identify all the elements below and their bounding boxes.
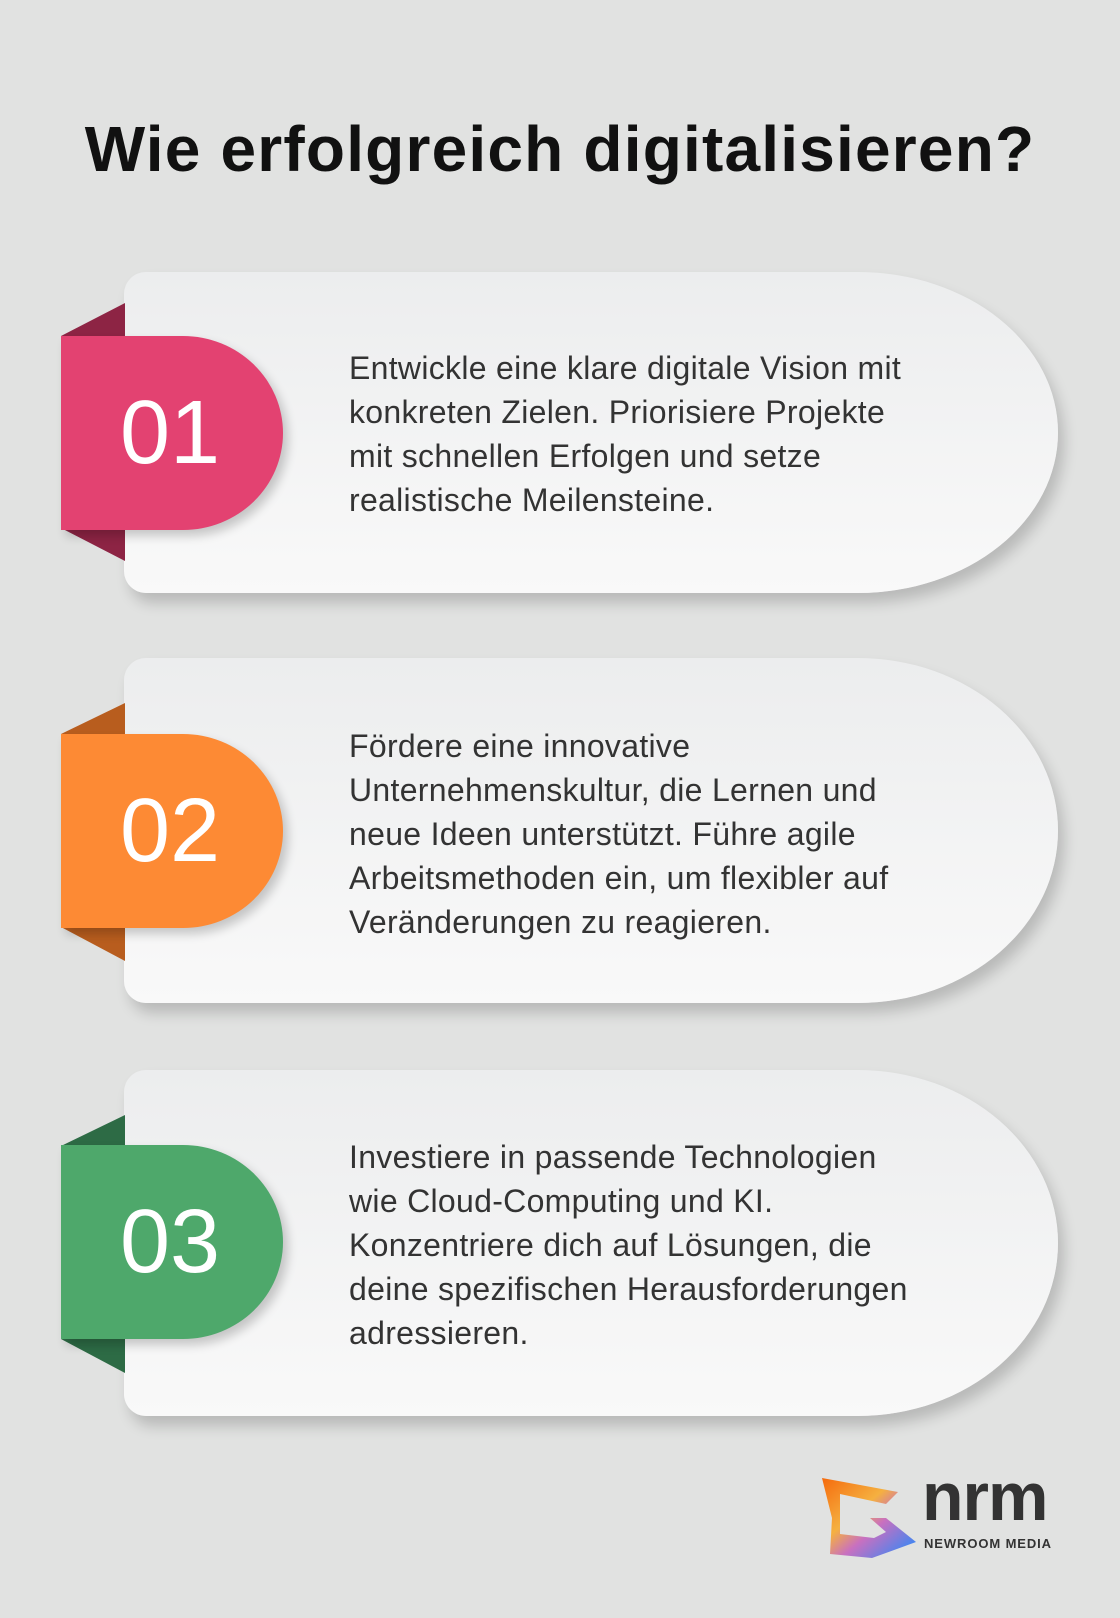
text 1: mit schnellen Erfolgen und setze xyxy=(349,438,821,474)
text 2: Arbeitsmethoden ein, um flexibler auf xyxy=(349,860,888,896)
panel: step 2 xyxy=(61,658,1070,1018)
text 2: neue Ideen unterstützt. Führe agile xyxy=(349,816,856,852)
text 1: realistische Meilensteine. xyxy=(349,482,714,518)
panel: step 3 xyxy=(61,1070,1070,1432)
text 3: deine spezifischen Herausforderungen xyxy=(349,1271,908,1307)
text 3: Konzentriere dich auf Lösungen, die xyxy=(349,1227,872,1263)
logo xyxy=(822,1459,1052,1558)
badge 03: 03 xyxy=(120,1192,220,1292)
text 3: wie Cloud-Computing und KI. xyxy=(349,1183,773,1219)
text 3: adressieren. xyxy=(349,1315,529,1351)
title: Wie erfolgreich digitalisieren? xyxy=(85,113,1035,185)
text 3: Investiere in passende Technologien xyxy=(349,1139,877,1175)
icon: logo mark xyxy=(822,1478,916,1558)
badge 03 xyxy=(61,1145,283,1339)
text 3 xyxy=(349,1139,908,1351)
text 1: Entwickle eine klare digitale Vision mit xyxy=(349,350,901,386)
text 2 xyxy=(349,728,888,940)
logo text: nrm xyxy=(922,1459,1047,1535)
badge 01: 01 xyxy=(120,382,220,482)
logo: NEWROOM MEDIA xyxy=(924,1536,1052,1551)
badge 02: 02 xyxy=(120,780,220,880)
text 1: konkreten Zielen. Priorisiere Projekte xyxy=(349,394,885,430)
panel: step 1 xyxy=(61,272,1069,608)
badge 02 xyxy=(61,734,283,928)
badge 01 xyxy=(61,336,283,530)
text 2: Fördere eine innovative xyxy=(349,728,690,764)
text 2: Veränderungen zu reagieren. xyxy=(349,904,772,940)
text 2: Unternehmenskultur, die Lernen und xyxy=(349,772,877,808)
text 1 xyxy=(349,350,901,518)
